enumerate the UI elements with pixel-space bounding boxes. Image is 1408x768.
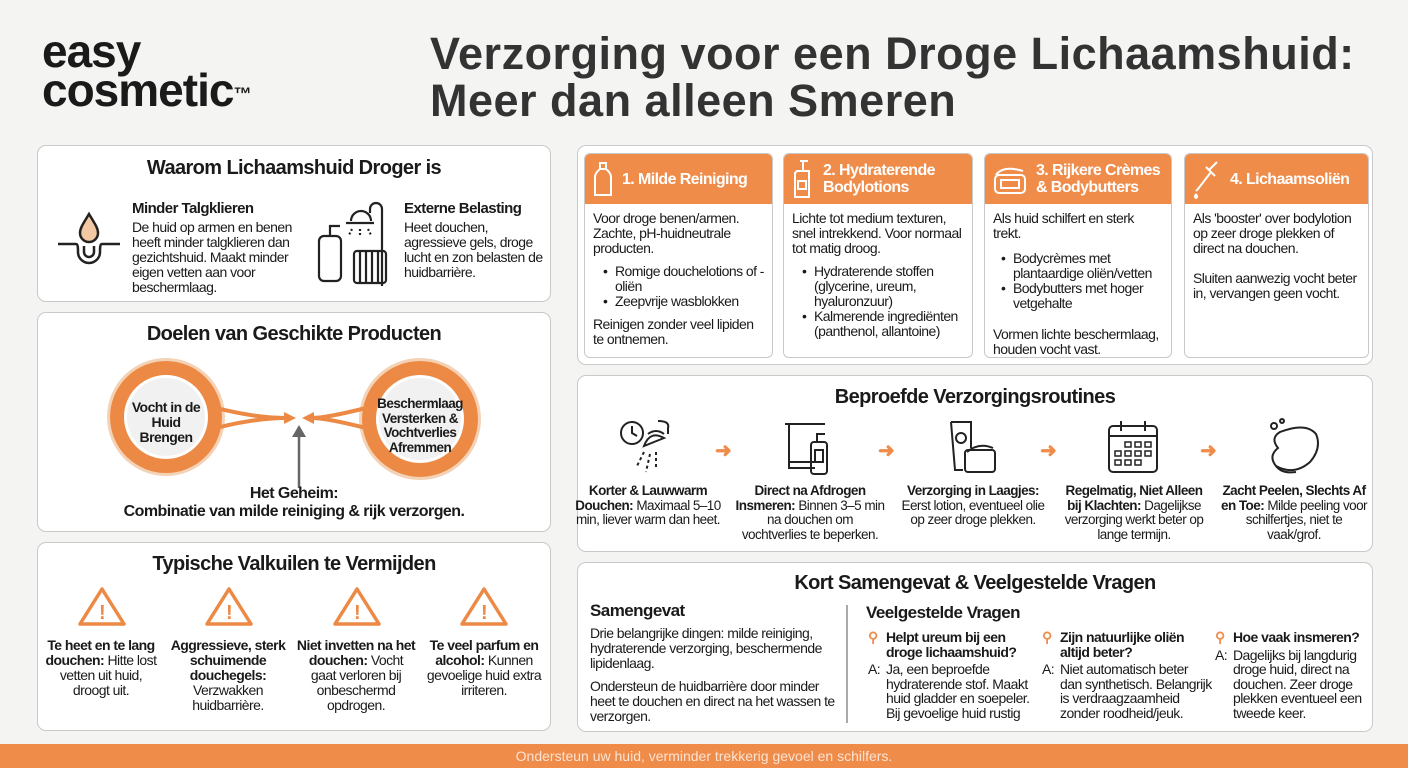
veelgestelde vragen: Veelgestelde Vragen — [866, 603, 1020, 622]
circle: beschermlaag: Versterken & — [382, 410, 458, 426]
card 3: & Bodybutters — [1036, 179, 1138, 196]
title — [430, 28, 1355, 126]
warnings: ! — [354, 602, 360, 624]
panel: routines: Regelmatig, Niet Alleen bij Klachten: Dagelijkse verzorging werkt beter op lange termijn. — [1065, 483, 1203, 542]
faq 2: Zijn natuurlijke oliën altijd beter? — [1060, 629, 1184, 660]
card 2: Kalmerende ingrediënten (panthenol, allantoine) — [814, 308, 958, 339]
card 4 — [1184, 153, 1369, 358]
icons routines — [620, 418, 1319, 475]
circle: vocht: Huid Brengen — [140, 414, 192, 444]
circle: beschermlaag: Afremmen — [389, 440, 451, 454]
card 4: Als 'booster' over bodylotion op zeer droge plekken of direct na douchen. — [1193, 210, 1351, 256]
panel: waarom — [37, 145, 551, 302]
text: externe belasting: Heet douchen, agressieve gels, droge lucht en zon belasten de huidbarrière. — [404, 219, 543, 280]
step texts: Korter & Lauwwarm Douchen: Maximaal 5–10 min, liever warm dan heet. — [575, 483, 721, 527]
panel: routines — [577, 375, 1373, 552]
panel: doelen — [37, 312, 551, 532]
warnings: Te heet en te lang douchen: Hitte lost vetten uit huid, droogt uit. — [46, 637, 156, 698]
icon: pore — [58, 212, 120, 264]
card 2 — [783, 153, 973, 358]
heading faq: Kort Samengevat & Veelgestelde Vragen — [794, 572, 1156, 594]
warnings: ! — [99, 602, 105, 624]
card 3: Bodybutters met hoger vetgehalte — [1013, 280, 1143, 311]
card 1: 1. Milde Reiniging — [622, 170, 747, 188]
text: het geheim: Combinatie van milde reiniging & rijk verzorgen. — [124, 503, 464, 520]
title: Verzorging voor een Droge Lichaamshuid: — [430, 28, 1355, 79]
text: minder talgklieren: De huid op armen en benen heeft minder talgklieren dan gezichtshuid. Maakt minder eigen vetten aan voor beschermlaag. — [132, 219, 292, 295]
warnings: ! — [481, 602, 487, 624]
heading valkuilen: Typische Valkuilen te Vermijden — [152, 553, 436, 575]
faq 2 — [1042, 629, 1212, 721]
faq 2: ⚲ — [1042, 629, 1052, 645]
faq 1 — [868, 629, 1029, 721]
heading waarom: Waarom Lichaamshuid Droger is — [147, 157, 441, 179]
card 3 — [984, 153, 1172, 358]
icons routines: ➜ — [1200, 440, 1216, 462]
panel: producten — [577, 145, 1373, 365]
panel: routines: Verzorging in Laagjes: Eerst lotion, eventueel olie op zeer droge plekken. — [902, 483, 1044, 527]
text: het geheim — [124, 485, 464, 520]
faq 1: ⚲ — [868, 629, 878, 645]
card 1: Zeepvrije wasblokken — [615, 293, 739, 309]
panel: valkuilen — [37, 542, 551, 731]
panel: routines: Direct na Afdrogen Insmeren: Binnen 3–5 min na douchen om vochtverlies te beperken. — [736, 483, 884, 542]
text: het geheim: Het Geheim: — [250, 485, 338, 502]
circle: beschermlaag: Vochtverlies — [384, 425, 456, 440]
warnings: Niet invetten na het douchen: Vocht gaat verloren bij onbeschermd opdrogen. — [297, 637, 415, 713]
circle: beschermlaag: Beschermlaag — [377, 396, 463, 411]
circle: vocht — [110, 361, 222, 473]
logo — [42, 25, 251, 116]
heading routines: Beproefde Verzorgingsroutines — [835, 386, 1115, 408]
card 3: Bodycrèmes met plantaardige oliën/vetten — [1013, 250, 1152, 281]
icon: shower soap radiator — [318, 202, 388, 286]
logo: cosmetic™ — [42, 64, 251, 116]
circle: beschermlaag — [362, 361, 478, 477]
icons routines: ➜ — [878, 440, 894, 462]
logo: easy — [42, 25, 140, 77]
card 1: Voor droge benen/armen. Zachte, pH-huidneutrale producten. Reinigen zonder veel lipiden te ontnemen. — [593, 210, 754, 347]
card 4: 4. Lichaamsoliën — [1230, 170, 1349, 188]
card 3: Als huid schilfert en sterk trekt. Vormen lichte beschermlaag, houden vocht vast. — [993, 210, 1159, 357]
card 3: 3. Rijkere Crèmes — [1036, 162, 1160, 179]
circle: vocht: Vocht in de — [132, 398, 200, 414]
faq 3: ⚲ — [1215, 629, 1225, 645]
footer: Ondersteun uw huid, verminder trekkerig gevoel en schilfers. — [516, 748, 892, 764]
text: externe belasting: Externe Belasting — [404, 200, 521, 217]
warnings: Te veel parfum en alcohol: Kunnen gevoelige huid extra irriteren. — [427, 637, 541, 698]
faq 3: Hoe vaak insmeren? — [1233, 629, 1359, 645]
footer — [0, 744, 1408, 768]
warnings — [46, 587, 542, 713]
title: Meer dan alleen Smeren — [430, 75, 956, 126]
icons routines: ➜ — [715, 440, 731, 462]
faq 3: A: — [1215, 646, 1227, 662]
card 1 — [584, 153, 773, 358]
card 2: Lichte tot medium texturen, snel intrekkend. Voor normaal tot matig droog. — [792, 210, 961, 256]
heading doelen: Doelen van Geschikte Producten — [147, 323, 441, 345]
warnings: Aggressieve, sterk schuimende douchegels: Verzwakken huidbarrière. — [171, 637, 285, 713]
warnings: ! — [226, 602, 232, 624]
icons routines: ➜ — [1040, 440, 1056, 462]
panel: routines: Zacht Peelen, Slechts Af en Toe: Milde peeling voor schilfertjes, niet te vaak/grof. — [1221, 483, 1367, 542]
card 2: 2. Hydraterende — [823, 162, 935, 179]
faq 2: Niet automatisch beter dan synthetisch. Belangrijk is verdraagzaamheid zonder roodheid/jeuk. — [1060, 661, 1212, 720]
arrows — [220, 406, 364, 488]
faq 3: Dagelijks bij langdurig droge huid, direct na douchen. Zeer droge plekken eventueel een tweede keer. — [1233, 646, 1362, 720]
text: minder talgklieren: Minder Talgklieren — [132, 200, 254, 217]
card 2: Hydraterende stoffen (glycerine, ureum, hyaluronzuur) — [814, 263, 934, 309]
faq 2: A: — [1042, 661, 1054, 677]
faq 1: A: — [868, 661, 880, 677]
samengevat: Drie belangrijke dingen: milde reiniging, hydraterende verzorging, beschermende lipidenlaag. Ondersteun de huidbarrière door minder heet te douchen en direct na het wassen te verzorgen. — [590, 625, 835, 724]
card 4: Sluiten aanwezig vocht beter in, vervangen geen vocht. — [1193, 270, 1357, 301]
card 1: Romige douchelotions of -oliën — [615, 263, 764, 294]
faq 1: Ja, een beproefde hydraterende stof. Maakt huid gladder en soepeler. Bij gevoelige huid rustig — [886, 661, 1029, 720]
samengevat: Samengevat — [590, 601, 685, 620]
card 2: Bodylotions — [823, 179, 909, 196]
panel: samenvatting & faq — [577, 562, 1373, 732]
faq 1: Helpt ureum bij een droge lichaamshuid? — [886, 629, 1016, 660]
